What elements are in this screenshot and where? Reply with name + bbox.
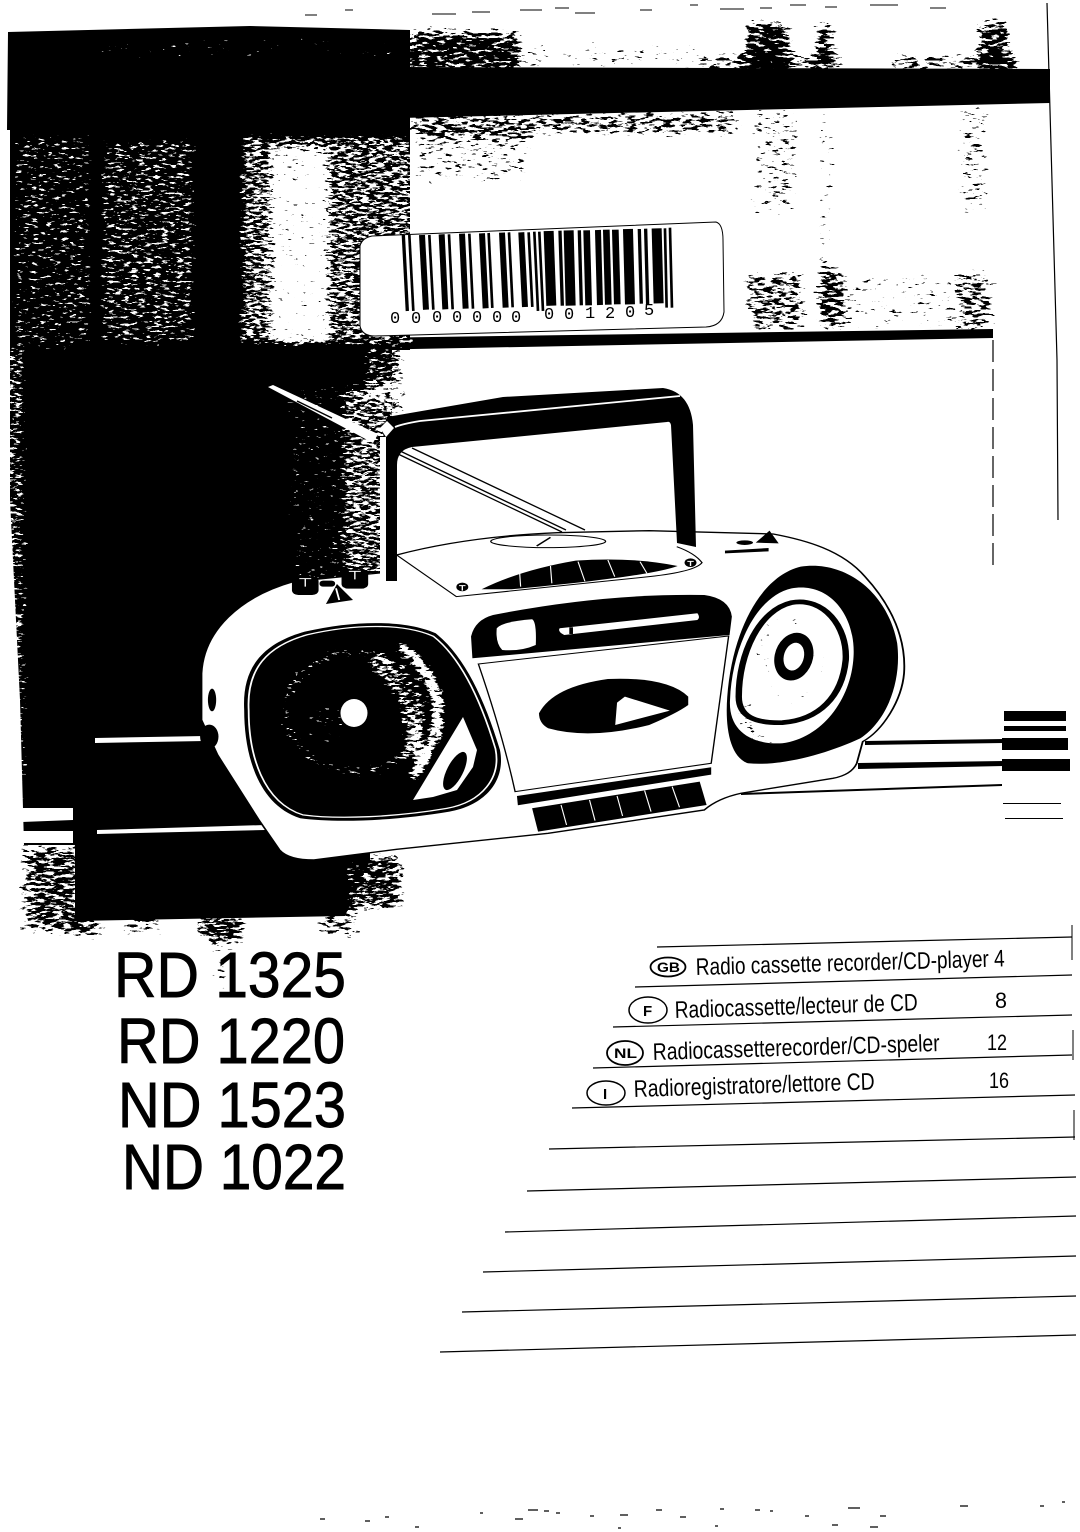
F row: 8 bbox=[995, 988, 1007, 1013]
right speaker bbox=[727, 566, 898, 764]
right speaker specks bbox=[745, 618, 820, 750]
solid black backdrop block bbox=[7, 26, 410, 921]
model numbers bbox=[114, 939, 346, 1203]
barcode bars bbox=[403, 228, 672, 311]
GB row: GB bbox=[657, 959, 680, 975]
barcode label bbox=[360, 222, 724, 336]
F row: Radiocassette/lecteur de CD bbox=[674, 989, 918, 1024]
model numbers: RD 1325 bbox=[114, 939, 346, 1011]
white grain in black block bbox=[6, 36, 415, 922]
left speaker grain bbox=[286, 645, 438, 778]
white stripes across backdrop bbox=[22, 736, 265, 843]
radio illustration bbox=[200, 531, 904, 860]
antenna bbox=[268, 385, 585, 532]
right margin lines bbox=[993, 3, 1074, 1140]
radio body bbox=[201, 531, 904, 860]
control buttons bbox=[517, 767, 711, 832]
I row: 16 bbox=[989, 1068, 1009, 1093]
cassette lid bbox=[397, 535, 702, 597]
model numbers: ND 1523 bbox=[118, 1069, 346, 1141]
NL row: Radiocassetterecorder/CD-speler bbox=[652, 1030, 940, 1066]
handle bbox=[380, 388, 696, 581]
NL row: NL bbox=[614, 1045, 638, 1061]
knobs bbox=[292, 569, 368, 604]
left side sockets bbox=[200, 689, 218, 749]
top right switch bbox=[725, 531, 779, 553]
I row: I bbox=[603, 1086, 607, 1103]
model numbers: RD 1220 bbox=[117, 1005, 345, 1077]
GB row bbox=[650, 945, 1005, 981]
I row bbox=[587, 1068, 1009, 1105]
horizontal rule under barcode band bbox=[360, 329, 993, 350]
left speaker centre hole bbox=[340, 699, 368, 727]
scanner specks top edge bbox=[305, 5, 946, 15]
I row: Radioregistratore/lettore CD bbox=[633, 1068, 875, 1103]
right edge black stripes bbox=[741, 711, 1070, 819]
model numbers: ND 1022 bbox=[122, 1131, 346, 1203]
GB row: Radio cassette recorder/CD-player 4 bbox=[695, 945, 1005, 981]
scanner specks bottom edge bbox=[320, 1502, 1065, 1528]
left speaker bbox=[244, 623, 501, 821]
barcode digits: 0000000001205 bbox=[390, 302, 654, 329]
top black band bbox=[400, 67, 1050, 118]
display panel bbox=[471, 595, 732, 658]
ruled lines bbox=[440, 937, 1076, 1352]
F row: F bbox=[643, 1003, 652, 1020]
cassette door bbox=[478, 636, 729, 792]
language contents list bbox=[587, 945, 1009, 1105]
NL row: 12 bbox=[987, 1030, 1007, 1055]
grainy photocopied edges on white bbox=[22, 20, 1020, 990]
left speaker lower wedge bbox=[413, 717, 477, 800]
